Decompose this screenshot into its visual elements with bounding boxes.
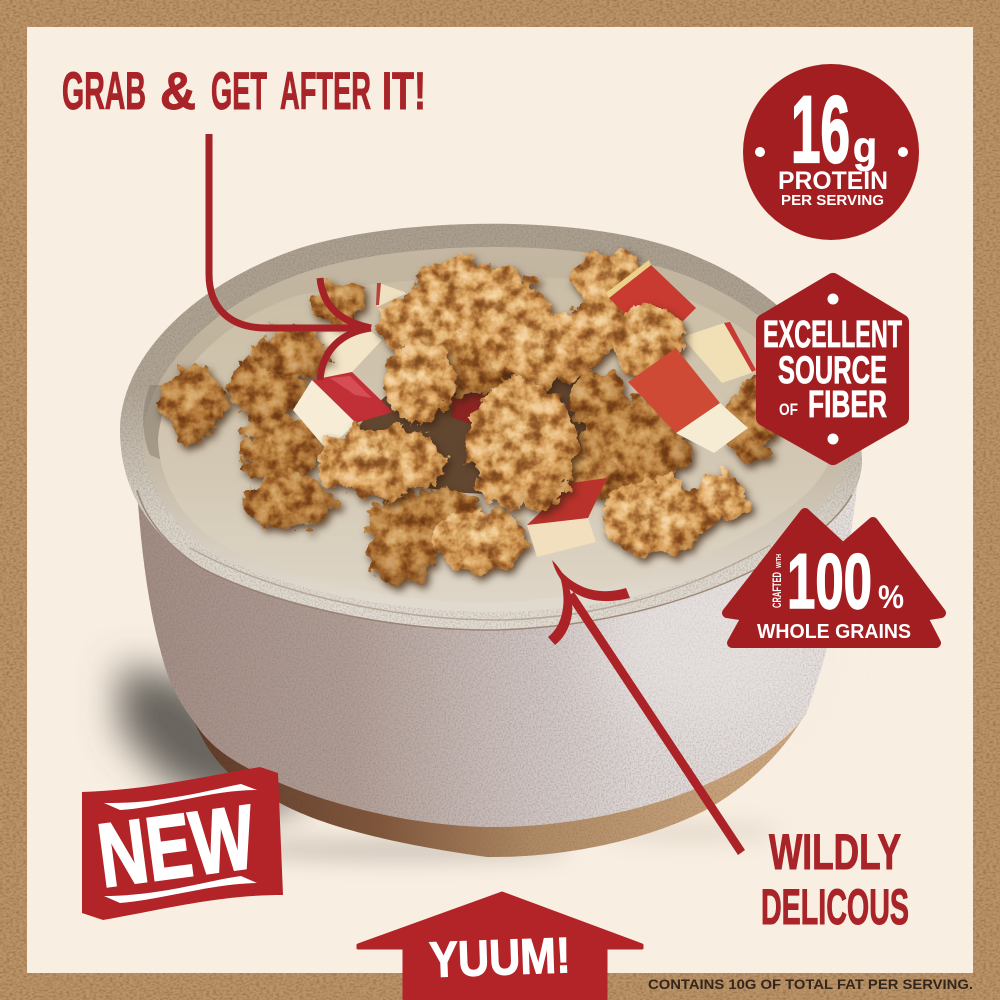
yogurt surface <box>158 277 832 603</box>
badge: 16g protein: 16 <box>791 77 850 183</box>
yuum arrow <box>358 893 642 1000</box>
arrow: grab & get <box>209 134 371 380</box>
bowl body <box>137 478 858 827</box>
badge: excellent source of fiber: FIBER <box>808 384 887 426</box>
apple pieces behind granola <box>312 283 756 427</box>
badge: excellent source of fiber <box>763 281 902 457</box>
top right apple <box>609 265 696 322</box>
title: GET <box>211 62 267 121</box>
badge: 100% whole grains: WITH <box>776 554 783 568</box>
title: AFTER <box>280 62 371 121</box>
title <box>62 62 426 121</box>
yuum arrow: YUUM! <box>428 927 571 988</box>
bowl shadow <box>120 665 780 860</box>
wildly delicious caption <box>761 824 909 935</box>
badge: excellent source of fiber: EXCELLENT <box>763 314 902 356</box>
new flag <box>82 767 283 920</box>
bowl photo <box>120 224 862 857</box>
left apple <box>293 380 356 450</box>
bowl base <box>195 712 806 857</box>
badge: 100% whole grains: 100 <box>787 537 872 625</box>
badge: 16g protein <box>743 64 919 240</box>
disclaimer: CONTAINS 10G OF TOTAL FAT PER SERVING. <box>648 976 973 992</box>
arrow: wildly delicious <box>548 560 745 855</box>
badge: 100% whole grains: WHOLE GRAINS <box>757 621 911 643</box>
title: IT! <box>382 62 426 121</box>
badge: 16g protein: PER SERVING <box>781 192 884 209</box>
badge: 16g protein: g <box>853 123 877 172</box>
badge: 100% whole grains: % <box>878 579 904 615</box>
inner bowl wall <box>143 247 848 612</box>
badge: 100% whole grains: CRAFTED <box>770 572 784 608</box>
apple pieces <box>293 260 696 557</box>
large apple <box>628 348 748 453</box>
title: GRAB <box>62 62 146 121</box>
badge: 100% whole grains <box>727 513 941 643</box>
new flag: NEW <box>93 787 260 907</box>
bottom apple <box>527 518 596 557</box>
badge: excellent source of fiber: OF <box>779 400 798 419</box>
title: & <box>160 62 196 121</box>
badge: 16g protein: PROTEIN <box>778 167 888 195</box>
granola clusters front layer <box>318 306 684 511</box>
granola clusters back layer <box>162 252 778 586</box>
badge: excellent source of fiber: SOURCE <box>778 349 887 392</box>
dark gap under granola <box>350 350 632 494</box>
wildly delicious caption: WILDLY <box>769 824 901 880</box>
bowl rim <box>120 224 862 630</box>
